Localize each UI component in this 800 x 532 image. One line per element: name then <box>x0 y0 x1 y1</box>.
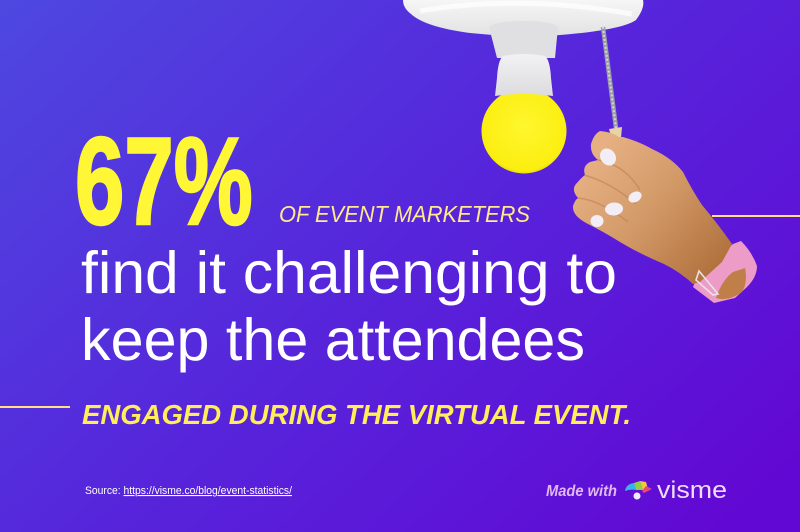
icon: hand pulling chain <box>573 131 757 303</box>
icon: visme mark <box>625 481 652 500</box>
made with visme logo <box>546 477 727 504</box>
wrist end <box>716 268 746 299</box>
finger creases <box>578 160 640 222</box>
lamp socket <box>489 21 558 58</box>
wrist band back <box>693 241 757 303</box>
decorative line right <box>712 215 800 217</box>
made with visme logo: Made with <box>546 483 617 500</box>
main statement: find it challenging to <box>81 240 617 306</box>
big statistic: 67% <box>75 111 253 250</box>
closing statement: ENGAGED DURING THE VIRTUAL EVENT. <box>82 399 631 430</box>
bulb base <box>495 54 553 96</box>
source: Source: https://visme.co/blog/event-statistics/ <box>85 485 293 497</box>
icon: pull chain <box>603 27 622 149</box>
ceiling rose <box>403 0 643 36</box>
main statement <box>81 240 617 373</box>
icon: ceiling lamp with yellow bulb <box>403 0 643 174</box>
hand shape <box>573 131 732 284</box>
bulb glass <box>482 88 566 174</box>
subheading: OF EVENT MARKETERS <box>279 201 531 227</box>
fingernails <box>597 145 619 169</box>
decorative line left <box>0 406 70 408</box>
main statement: keep the attendees <box>81 307 585 373</box>
made with visme logo: visme <box>657 477 727 504</box>
watch buckle <box>696 271 718 295</box>
